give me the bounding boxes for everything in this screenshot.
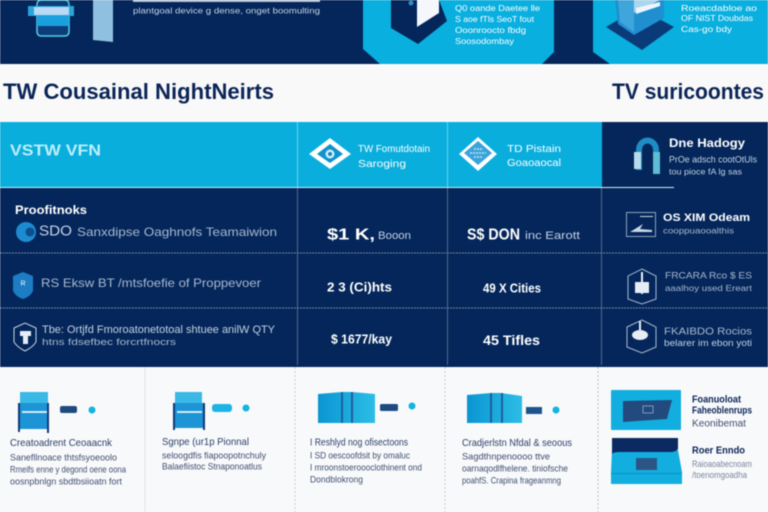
card one text: Sanefllnoace thtsfsyoeoolo xyxy=(10,452,117,464)
right column row three text: FKAIBDO Rocios xyxy=(664,326,752,338)
banner text middle xyxy=(455,3,540,46)
header text three: tou pioce fA lg sas xyxy=(669,168,742,176)
value: row two column two: 49 X Cities xyxy=(483,280,541,296)
row three label: htns fdsefbec forcrtfnocrs xyxy=(42,337,177,347)
card five text lower: Raioaoabecnoam xyxy=(692,459,752,469)
dash and dot xyxy=(380,402,416,411)
card two text xyxy=(162,436,266,472)
right column row two text: aaalhoy used Ereart xyxy=(665,283,753,293)
icon: hexagon two xyxy=(627,320,656,353)
right column row one text: OS XIM Odeam xyxy=(663,212,750,224)
card three text: Dondblokrong xyxy=(310,474,363,486)
card one xyxy=(10,392,127,488)
row heading: Proofitnoks xyxy=(15,203,87,217)
card two xyxy=(162,392,266,472)
header text three xyxy=(669,138,757,176)
card three text xyxy=(310,438,422,486)
card three text: I SD oescoofdsit by omaluc xyxy=(310,450,410,462)
icon: chair two xyxy=(173,392,205,430)
icon: upright panel xyxy=(93,0,113,42)
icon: framed chart xyxy=(626,212,656,236)
value: row three column two: 45 Tifles xyxy=(483,332,540,348)
column heading: VSTW VFN xyxy=(10,142,101,160)
bottom feature cards xyxy=(0,367,768,512)
table header xyxy=(0,122,768,188)
right column row two text: FRCARA Rco $ ES xyxy=(665,270,752,282)
card three text: I mroonstoeroooclothinent ond xyxy=(310,462,422,474)
value: row one column one: Booon xyxy=(378,230,411,242)
card four text xyxy=(462,437,572,486)
right column row three text xyxy=(664,326,752,348)
value: row one column two: S$ DON xyxy=(467,226,520,244)
card four text: Cradjerlstn Nfdal & seoous xyxy=(462,437,572,449)
banner text right xyxy=(681,3,757,34)
value: row one column two: inc Earott xyxy=(525,230,580,242)
banner text right: Cas-go bdy xyxy=(681,24,733,34)
icon: chair xyxy=(28,0,74,36)
icon: cyan case xyxy=(611,438,682,484)
dash and dot xyxy=(212,404,250,412)
right column row two text xyxy=(665,270,753,293)
heading left: TW Cousainal NightNeirts xyxy=(3,79,274,104)
value: row two column one: 2 3 (Ci)hts xyxy=(327,280,392,294)
value: row one column two xyxy=(467,226,580,244)
icon: diamond one xyxy=(309,138,351,169)
dash and dot xyxy=(526,406,560,414)
title band xyxy=(0,64,768,122)
value: row one column one: $1 K, xyxy=(327,226,375,244)
card five text upper: Faheoblenrups xyxy=(692,406,752,416)
value: row one column one xyxy=(327,226,411,244)
banner text left: plantgoal device g dense, onget boomulting xyxy=(133,6,320,16)
icon: diamond two xyxy=(459,137,497,171)
right column row one text: cooppuaooalthis xyxy=(663,226,734,236)
icon: arch xyxy=(634,140,660,174)
header text two: TD Pistain xyxy=(507,143,561,155)
card four text: poahfS. Crapina frageanmng xyxy=(462,476,561,486)
banner text right: Roeacdabloe ao xyxy=(681,3,757,13)
icon: globe xyxy=(16,222,36,242)
header text two xyxy=(507,143,561,169)
header text one xyxy=(358,143,430,170)
card two text: seloogdfis fiapoopotnchuly xyxy=(162,450,266,462)
right column row three text: belarer im ebon yoti xyxy=(664,338,752,348)
card two text: Sgnpe (ur1p Pionnal xyxy=(162,436,249,448)
icon: open folder two xyxy=(467,393,522,423)
icon: blue shield xyxy=(13,272,33,299)
card four text: Sagdthnpenoooo ttve xyxy=(462,452,550,462)
row one label: Sanxdipse Oaghnofs Teamaiwion xyxy=(77,225,277,239)
header text three: Dne Hadogy xyxy=(669,138,746,150)
card five text upper: Foanuoloat xyxy=(692,394,742,406)
header text two: Goaoaocal xyxy=(507,157,561,169)
row two label: RS Eksw BT /mtsfoefie of Proppevoer xyxy=(41,276,261,290)
card four text: oarnaqodlfhelene. tiniofsche xyxy=(462,464,568,474)
icon: hexagon one xyxy=(628,269,656,304)
row one label xyxy=(39,222,277,240)
icon: cyan screen xyxy=(611,390,681,430)
banner text right: OF NIST Doubdas xyxy=(681,13,753,23)
card five text upper xyxy=(692,394,752,430)
top banner xyxy=(0,0,768,64)
card five text lower: Roer Enndo xyxy=(692,446,745,456)
card five text upper: Keonibemat xyxy=(692,418,746,430)
card three text: I Reshlyd nog ofisectoons xyxy=(310,438,408,448)
card one text: oosnpbnlgn sbdtbsiioatn fort xyxy=(10,476,122,488)
icon: blue shield: R xyxy=(20,280,26,288)
comparison table xyxy=(0,188,768,367)
banner text middle: Q0 oande Daetee lle xyxy=(455,3,540,13)
icon: chair one xyxy=(18,392,49,433)
card five xyxy=(611,390,752,484)
icon: box xyxy=(391,0,447,44)
right column row one text xyxy=(663,212,750,236)
icon: outline shield xyxy=(14,323,36,351)
card four xyxy=(462,393,572,486)
icon: glass cube xyxy=(606,0,674,50)
card one text: Creatoadrent Ceoaacnk xyxy=(10,437,113,449)
banner text middle: Ooonroocto fbdg xyxy=(455,25,526,35)
card one text: Rmeifs enne y degond oene oona xyxy=(10,464,127,476)
banner text middle: S aoe fTls SeoT fout xyxy=(455,14,535,24)
heading right: TV suricoontes xyxy=(612,79,764,104)
card one text xyxy=(10,437,127,488)
card five text lower: /toenomgoadha xyxy=(692,470,747,480)
card three xyxy=(310,392,422,486)
header text one: Saroging xyxy=(358,158,406,170)
header text one: TW Fomutdotain xyxy=(358,143,430,155)
row three label: Tbe: Ortjfd Fmoroatonetotoal shtuee anilW QTY xyxy=(42,324,276,336)
row three label xyxy=(42,324,276,347)
row one label: SDO xyxy=(39,222,72,240)
card five text lower xyxy=(692,446,752,480)
value: row three column one: $ 1677/kay xyxy=(331,332,393,346)
card two text: Balaefiistoc Stnaponoatlus xyxy=(162,462,262,472)
icon: open folder one xyxy=(318,392,375,423)
header text three: PrOe adsch cootOtUls xyxy=(669,154,757,166)
banner text middle: Soosodombay xyxy=(455,36,515,46)
dash and dot xyxy=(60,406,96,414)
